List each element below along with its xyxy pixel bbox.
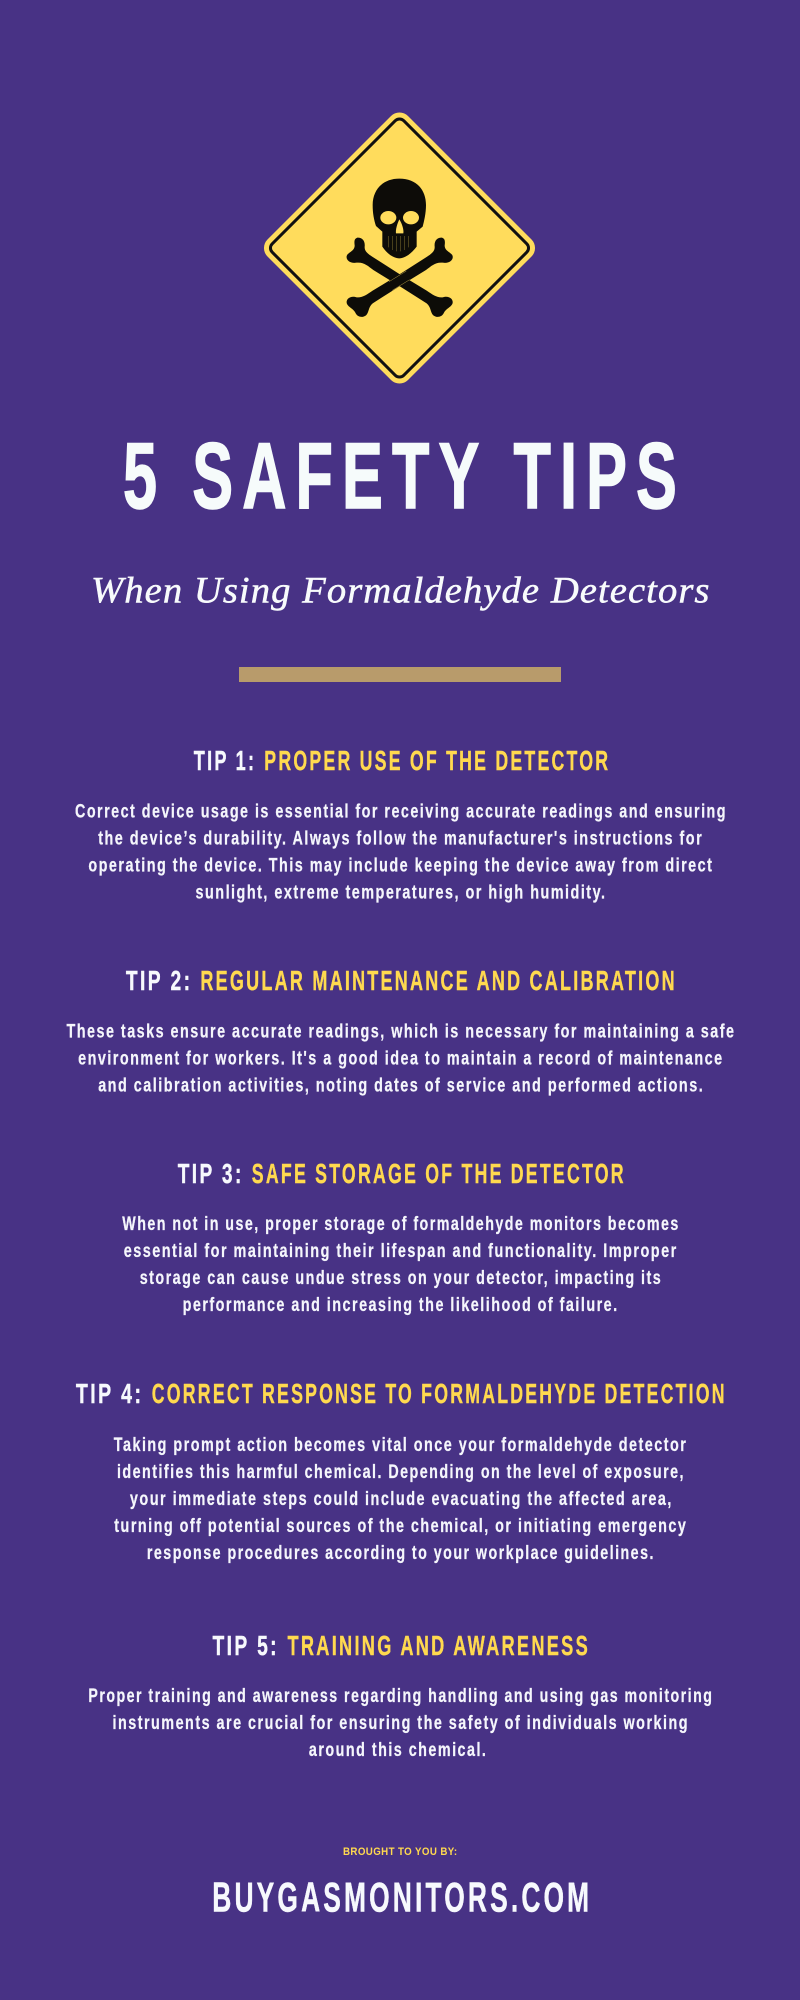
tip 5 heading: TRAINING AND AWARENESS bbox=[288, 1630, 590, 1661]
bone crossing highlight bbox=[389, 271, 410, 290]
skull and crossbones symbol bbox=[347, 179, 453, 317]
panel: tip 2 bbox=[66, 965, 736, 1096]
tip 1 heading bbox=[194, 745, 610, 776]
icon: skull and crossbones warning sign bbox=[259, 107, 540, 389]
tip 5 body text bbox=[88, 1685, 713, 1761]
footer website name: BUYGASMONITORS.COM bbox=[212, 1874, 592, 1921]
tip 5 heading: TIP 5: bbox=[212, 1630, 279, 1661]
bone: upper right to lower left bbox=[347, 238, 453, 317]
tip 5 body text: around this chemical. bbox=[309, 1739, 487, 1761]
tip 1 heading: TIP 1: bbox=[194, 745, 256, 776]
tip 3 heading bbox=[178, 1158, 626, 1189]
tip 3 heading: TIP 3: bbox=[178, 1158, 244, 1189]
diamond black inner border bbox=[268, 116, 531, 380]
panel: tip 5 bbox=[88, 1630, 713, 1761]
tip 5 heading bbox=[212, 1630, 590, 1661]
tip 1 body text: sunlight, extreme temperatures, or high humidity. bbox=[196, 881, 606, 903]
bone: upper left to lower right bbox=[347, 238, 453, 317]
tip 4 heading: TIP 4: bbox=[76, 1378, 143, 1409]
tip 2 body text bbox=[66, 1020, 736, 1096]
tip 2 heading: TIP 2: bbox=[126, 965, 192, 996]
diamond sign plate bbox=[259, 107, 540, 389]
tip 1 heading: PROPER USE OF THE DETECTOR bbox=[264, 745, 610, 776]
panel: tip 3 bbox=[122, 1158, 680, 1316]
subtitle: When Using Formaldehyde Detectors bbox=[91, 570, 710, 612]
tip 1 body text bbox=[75, 800, 727, 903]
panel: tip 1 bbox=[75, 745, 727, 903]
divider bar bbox=[239, 667, 561, 682]
tip 3 body text bbox=[122, 1213, 680, 1316]
tip 4 body text bbox=[114, 1434, 687, 1564]
panel: tip 4 bbox=[76, 1378, 727, 1564]
tip 3 body text: performance and increasing the likelihood of failure. bbox=[183, 1294, 619, 1316]
footer credit label: BROUGHT TO YOU BY: bbox=[343, 1846, 458, 1858]
skull bbox=[373, 179, 426, 258]
